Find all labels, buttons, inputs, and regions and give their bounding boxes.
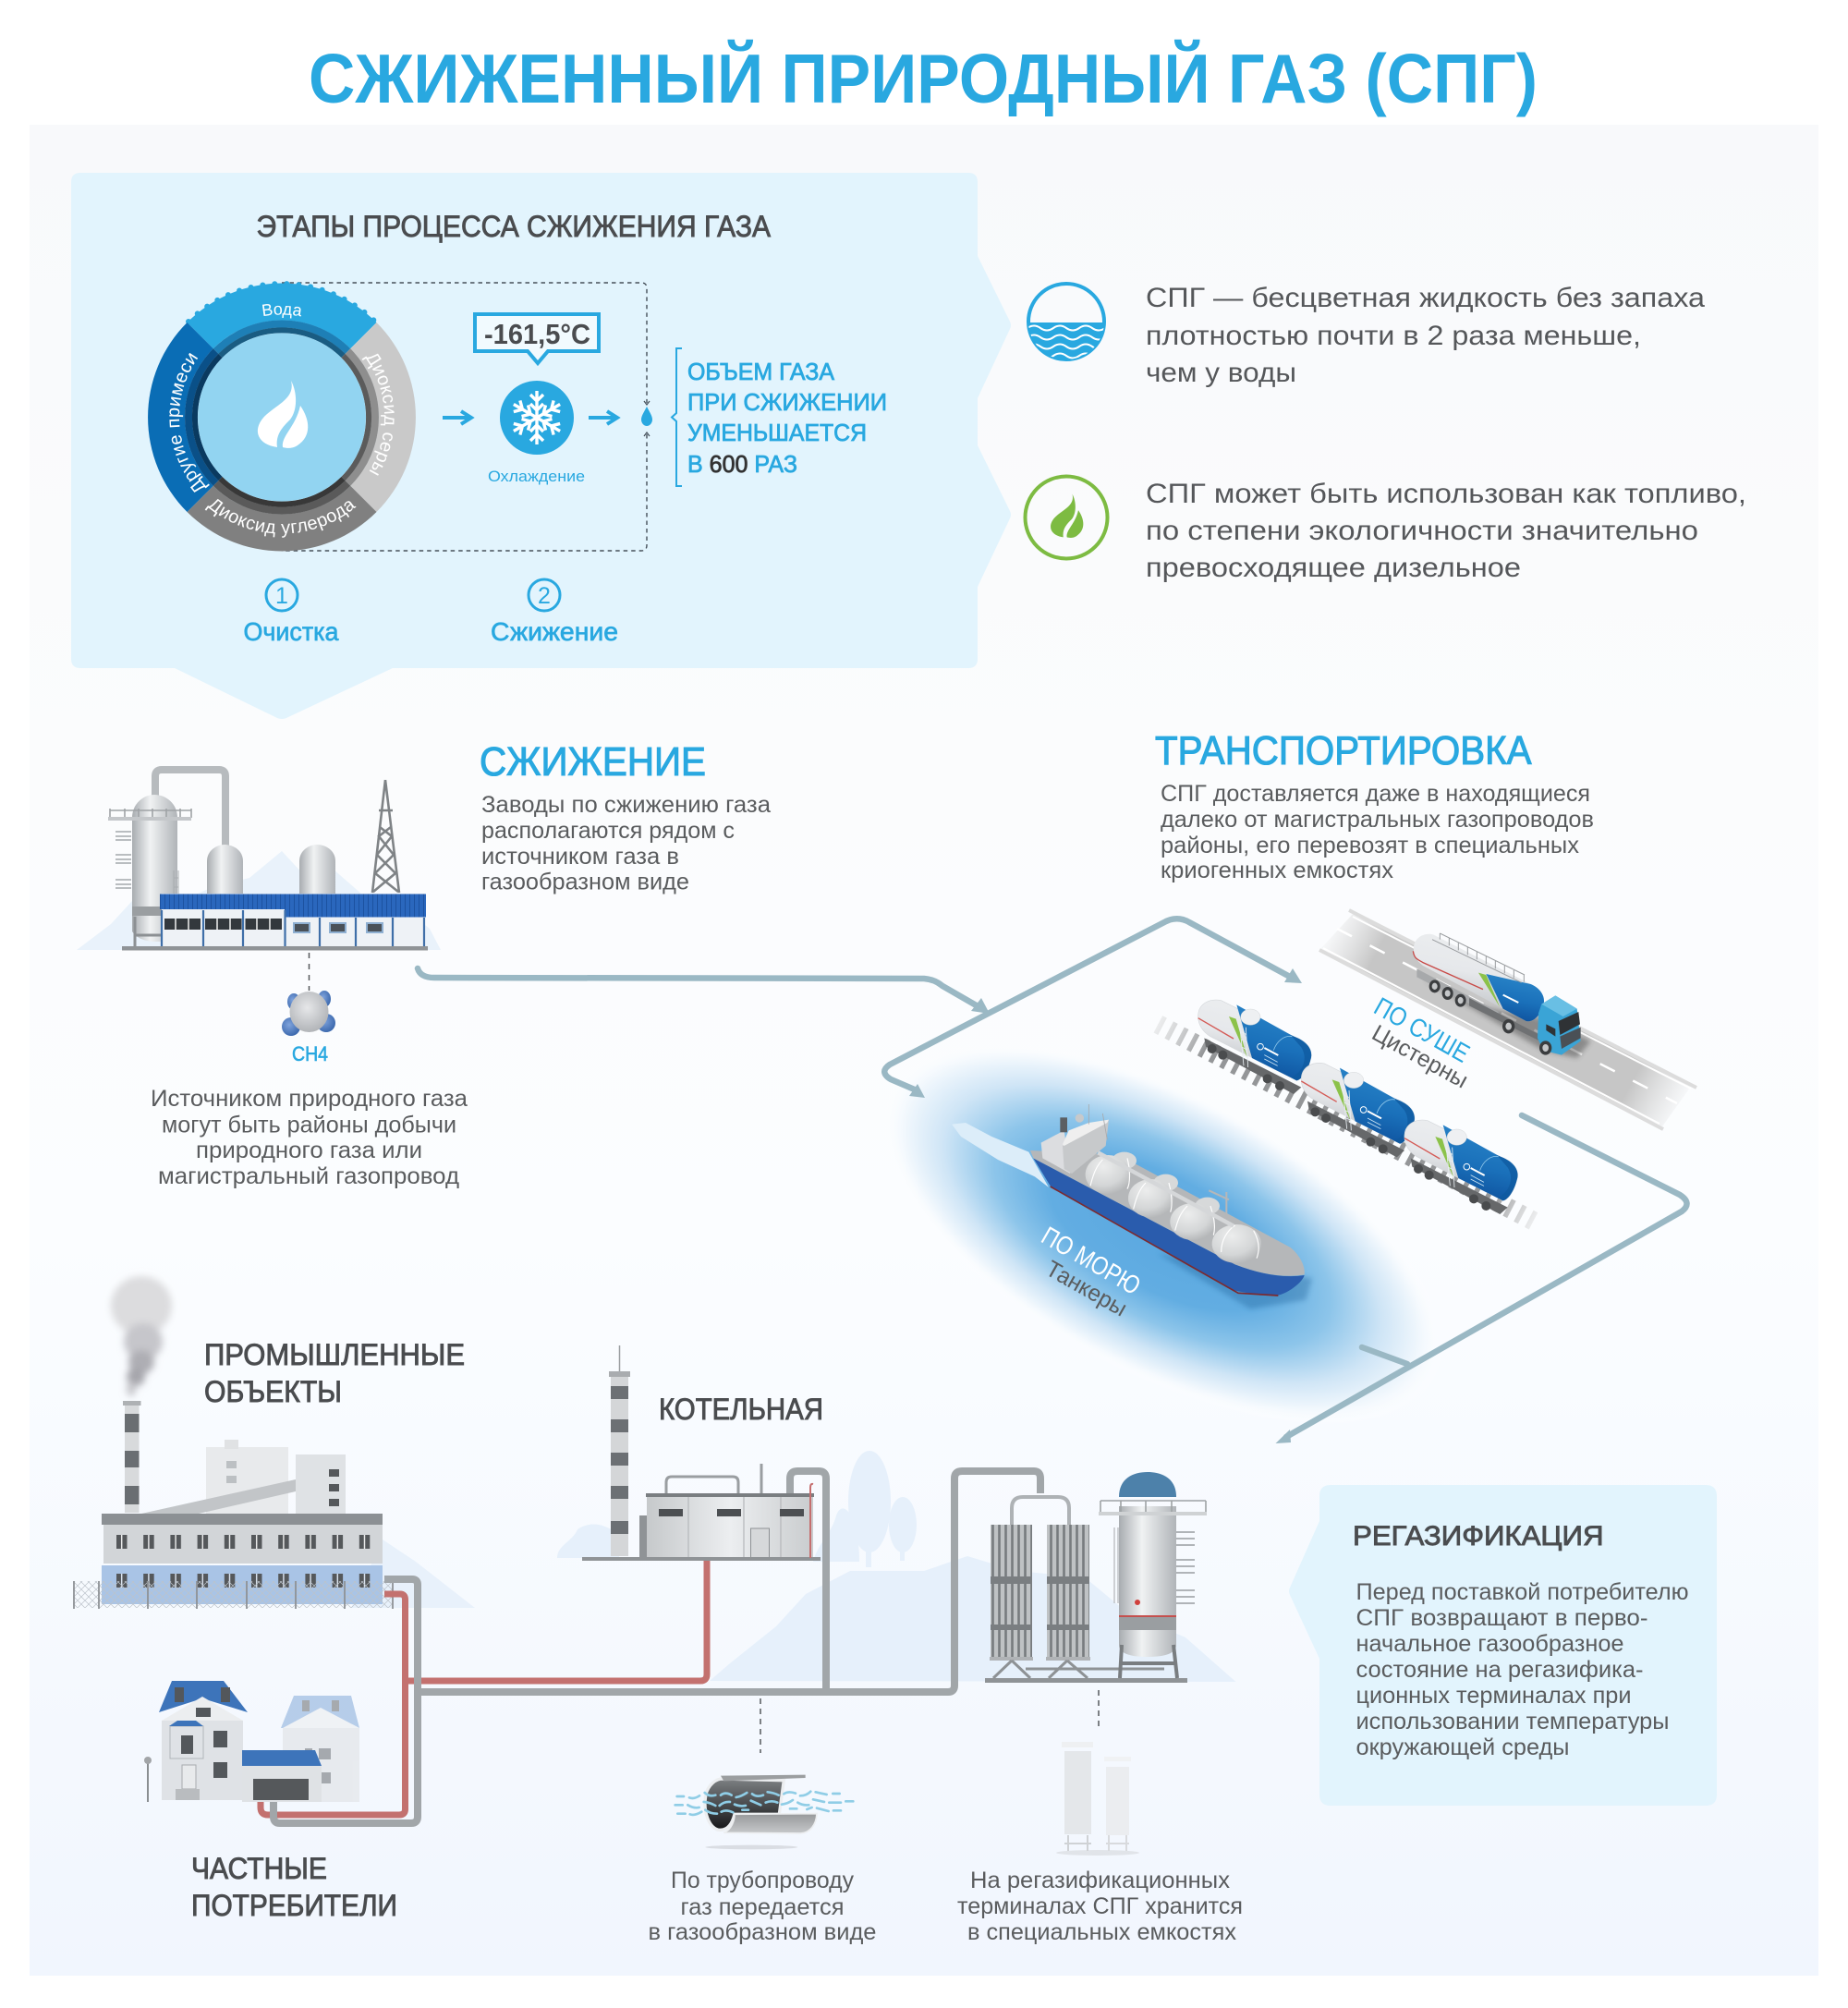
industrial plant illustration (73, 1401, 393, 1609)
road lane dashes (1337, 929, 1677, 1103)
cooling caption: Охлаждение (488, 468, 585, 485)
truck tank top rail (1432, 933, 1525, 982)
liquefaction text: Заводы по сжижению газа (481, 792, 771, 818)
storage caption: На регазификационных (970, 1868, 1231, 1893)
truck chassis (1416, 968, 1499, 1019)
hull (1033, 1158, 1305, 1296)
distillation column (108, 795, 191, 948)
rear tank tops (1112, 1152, 1220, 1214)
rear buildings (206, 1440, 346, 1514)
ring segment: sulfur dioxide (350, 322, 416, 512)
inner ring bands (188, 324, 375, 510)
step 2 label: Сжижение (491, 617, 618, 646)
panel text (1356, 1579, 1689, 1760)
thin red pipe (810, 1484, 813, 1558)
regasification terminal illustration (985, 1472, 1207, 1683)
pipe caption: газ передается (680, 1894, 845, 1920)
lower floor (102, 1565, 383, 1604)
crane (1209, 1190, 1229, 1218)
road with tanker truck (1319, 910, 1696, 1129)
heading: liquefaction: СЖИЖЕНИЕ (480, 739, 706, 785)
upper windows (116, 1535, 386, 1549)
chimney (609, 1345, 630, 1556)
bracket (672, 348, 682, 486)
storage tanks (207, 845, 335, 896)
rail ties (1158, 1024, 1537, 1223)
ring centre (198, 333, 366, 501)
heading: private consumers: ПОТРЕБИТЕЛИ (191, 1889, 397, 1922)
liquefaction text: располагаются рядом с (481, 818, 735, 844)
heading: transportation: ТРАНСПОРТИРОВКА (1155, 728, 1532, 773)
panel background (1289, 1485, 1717, 1806)
heading: industrial sites: ПРОМЫШЛЕННЫЕ (204, 1338, 465, 1371)
superstructure (1041, 1104, 1109, 1174)
tanker label: Танкеры (1041, 1256, 1131, 1321)
methane label: CH4 (292, 1042, 328, 1065)
fact: ecological fuel: СПГ может быть использован как топливо, (1146, 479, 1746, 509)
transportation text: далеко от магистральных газопроводов (1161, 807, 1594, 833)
step 1 label: Очистка (244, 617, 339, 646)
panel text: окружающей среды (1356, 1734, 1569, 1760)
gas waves (675, 1792, 853, 1815)
ship shadow (1158, 1254, 1312, 1309)
plant building (122, 894, 428, 950)
heading: industrial sites (204, 1338, 465, 1408)
road (1320, 913, 1693, 1126)
storage caption: в специальных емкостях (967, 1919, 1237, 1945)
pipe caption: в газообразном виде (649, 1919, 876, 1945)
icon: water (1026, 284, 1109, 363)
base (985, 1678, 1187, 1683)
wheel hubs (1432, 983, 1512, 1030)
panel background with pointers (71, 173, 1011, 719)
cleaning ring diagram (148, 281, 416, 551)
gas source text: Источником природного газа (151, 1086, 468, 1112)
transportation text (1161, 781, 1594, 883)
sea area with tanker (823, 965, 1502, 1503)
callout box (475, 314, 599, 363)
arrow: plant to transport junction (418, 968, 990, 1014)
gas source text (151, 1086, 468, 1189)
sea label: ПО МОРЮ (1037, 1221, 1146, 1300)
panel: liquefaction stages (71, 173, 1011, 719)
windows (659, 1509, 804, 1516)
panel heading: ЭТАПЫ ПРОЦЕССА СЖИЖЕНИЯ ГАЗА (257, 210, 772, 243)
panel heading: РЕГАЗИФИКАЦИЯ (1353, 1521, 1604, 1552)
fact: colourless liquid: СПГ — бесцветная жидкость без запаха (1146, 283, 1705, 313)
fact: colourless liquid: чем у воды (1146, 358, 1296, 388)
dashed link to methane (309, 953, 310, 991)
fact: ecological fuel: превосходящее дизельное (1146, 553, 1521, 583)
icon: methane molecule (282, 991, 335, 1036)
truck shadow (1423, 980, 1591, 1058)
fact: ecological fuel: по степени экологичности значительно (1146, 516, 1698, 546)
railway with tank cars (1158, 1000, 1537, 1223)
icon: gas pipe section (675, 1775, 853, 1849)
pipe upper shell (721, 1775, 806, 1781)
waterline (1051, 1187, 1278, 1296)
vaporizer arch pipe (1012, 1497, 1069, 1525)
ring label: other impurities: Другие примеси (169, 353, 210, 493)
icon: green flame (1026, 477, 1107, 558)
transportation text: СПГ доставляется даже в находящиеся (1161, 781, 1590, 807)
icon: liquid drop (641, 407, 652, 426)
pipe caption: По трубопроводу (671, 1868, 854, 1893)
heading: private consumers: ЧАСТНЫЕ (191, 1852, 327, 1885)
arrow: cleaning to cooling (443, 411, 471, 424)
fact: ecological fuel (1146, 479, 1746, 583)
heading: private consumers (191, 1852, 397, 1922)
panel text: СПГ возвращают в перво- (1356, 1605, 1648, 1631)
volume reduction note: ПРИ СЖИЖЕНИИ (687, 388, 887, 416)
smoke (111, 1276, 172, 1396)
building (647, 1497, 813, 1558)
ring label: water: Вода (262, 304, 301, 318)
step 2 badge: 2 (538, 583, 551, 609)
step 2 badge (529, 579, 560, 611)
wavy edge of water segment (188, 284, 375, 322)
regas column (1099, 1472, 1207, 1678)
pipe caption (649, 1868, 876, 1945)
panel text: состояние на регазифика- (1356, 1657, 1643, 1683)
wall seams (688, 1497, 781, 1558)
private houses illustration (144, 1681, 359, 1802)
rail car 2 (1301, 1063, 1415, 1157)
heading: boiler house: КОТЕЛЬНАЯ (659, 1393, 823, 1426)
gas source text: магистральный газопровод (158, 1163, 459, 1189)
tanker truck (1413, 933, 1591, 1058)
ring segment: carbon dioxide (187, 486, 377, 551)
transportation text: районы, его перевозят в специальных (1161, 833, 1579, 858)
pipe shadow (705, 1845, 797, 1849)
main house (159, 1681, 248, 1800)
fact: colourless liquid (1146, 283, 1705, 388)
panel text: начальное газообразное (1356, 1631, 1624, 1657)
door (750, 1528, 769, 1558)
storage caption: терминалах СПГ хранится (957, 1893, 1243, 1919)
red pipeline (261, 1561, 707, 1815)
sea ellipse (823, 965, 1502, 1503)
backdrop mountain: industrial (351, 1539, 475, 1608)
liquefaction text: источником газа в (481, 844, 679, 870)
fact: colourless liquid: плотностью почти в 2 раза меньше, (1146, 321, 1641, 351)
base (582, 1557, 821, 1561)
volume reduction note: В 600 РАЗ (687, 450, 797, 478)
land label: ПО СУШЕ (1369, 992, 1475, 1068)
pipelines (261, 1471, 1040, 1823)
spherical cargo tanks (1086, 1155, 1261, 1263)
truck tank green blade (1478, 973, 1500, 1007)
step 1 badge: 1 (275, 583, 288, 609)
upper floor (103, 1525, 383, 1564)
truck tank stripes (1413, 951, 1483, 990)
truck wheels (1429, 980, 1514, 1033)
garage (242, 1750, 322, 1802)
pipe lower shell (723, 1814, 817, 1833)
central walkway (1098, 1152, 1234, 1226)
icon: storage tanks (1056, 1742, 1139, 1856)
panel text: использовании температуры (1356, 1709, 1669, 1734)
ring label: sulfur dioxide: Диоксид серы (362, 353, 395, 476)
tanker (952, 1104, 1312, 1309)
ring segment: water (187, 284, 377, 348)
rail car 3 (1404, 1120, 1518, 1214)
liquefaction text: газообразном виде (481, 869, 689, 894)
inner dark bands (195, 330, 369, 505)
backdrop mountain and trees: regasification (557, 1451, 1236, 1682)
storage caption (957, 1868, 1243, 1945)
lamp (147, 1763, 149, 1802)
trucks label: Цистерны (1368, 1020, 1472, 1094)
icon: snowflake cooling (500, 381, 574, 455)
title: СЖИЖЕННЫЙ ПРИРОДНЫЙ ГАЗ (СПГ) (309, 40, 1538, 117)
gas source text: могут быть районы добычи (162, 1113, 456, 1138)
callout value: -161,5°C (484, 318, 590, 350)
ring label: carbon dioxide: Диоксид углерода (205, 499, 357, 538)
vaporizers (990, 1525, 1164, 1678)
tank meridians (1090, 1158, 1258, 1259)
dashed link to pipe section (760, 1698, 761, 1753)
icon: white gas flame (258, 381, 308, 448)
temperature callout (475, 314, 599, 363)
truck cab (1538, 995, 1581, 1055)
lower windows (116, 1574, 386, 1588)
step 1 badge (266, 579, 298, 611)
rear house (281, 1696, 359, 1802)
rail car 1 (1198, 1000, 1311, 1094)
roof (102, 1514, 383, 1525)
volume reduction note: ОБЪЕМ ГАЗА (687, 358, 835, 385)
volume reduction note (687, 358, 887, 478)
truck tank body (1414, 934, 1544, 1021)
liquefaction text (481, 792, 771, 894)
panel text: ционных терминалах при (1356, 1683, 1632, 1709)
grey pipeline (274, 1471, 1040, 1823)
mountain backdrop (77, 851, 441, 950)
dashed circuit line (282, 283, 647, 551)
dashed link to storage (1098, 1690, 1100, 1728)
ring segment: other impurities (148, 322, 213, 512)
dashed line arrowheads (644, 401, 650, 436)
deck (1030, 1150, 1305, 1276)
arrow: transport to regasification (1275, 1115, 1687, 1443)
chimney (123, 1401, 140, 1513)
boiler house illustration (582, 1345, 821, 1561)
gas source text: природного газа или (196, 1138, 422, 1163)
arrow: split to road and sea (884, 919, 1302, 1098)
arrow: cooling to liquid (589, 411, 617, 424)
truck tank blue end (1486, 974, 1544, 1021)
overhead pipe (155, 770, 225, 846)
conveyor (141, 1479, 296, 1514)
road markings (1319, 910, 1696, 1129)
lattice tower (372, 780, 399, 893)
panel: regasification (1289, 1485, 1717, 1806)
roof pipes (666, 1464, 761, 1493)
fence (73, 1581, 393, 1609)
heading: industrial sites: ОБЪЕКТЫ (204, 1375, 342, 1408)
truck tank logo mark (1503, 995, 1518, 1003)
volume reduction note: УМЕНЬШАЕТСЯ (687, 419, 867, 446)
panel text: Перед поставкой потребителю (1356, 1579, 1689, 1605)
transportation text: криогенных емкостях (1161, 858, 1394, 883)
ship wake (952, 1123, 1049, 1187)
pipe inside (705, 1779, 784, 1830)
liquefaction plant illustration (77, 770, 441, 950)
